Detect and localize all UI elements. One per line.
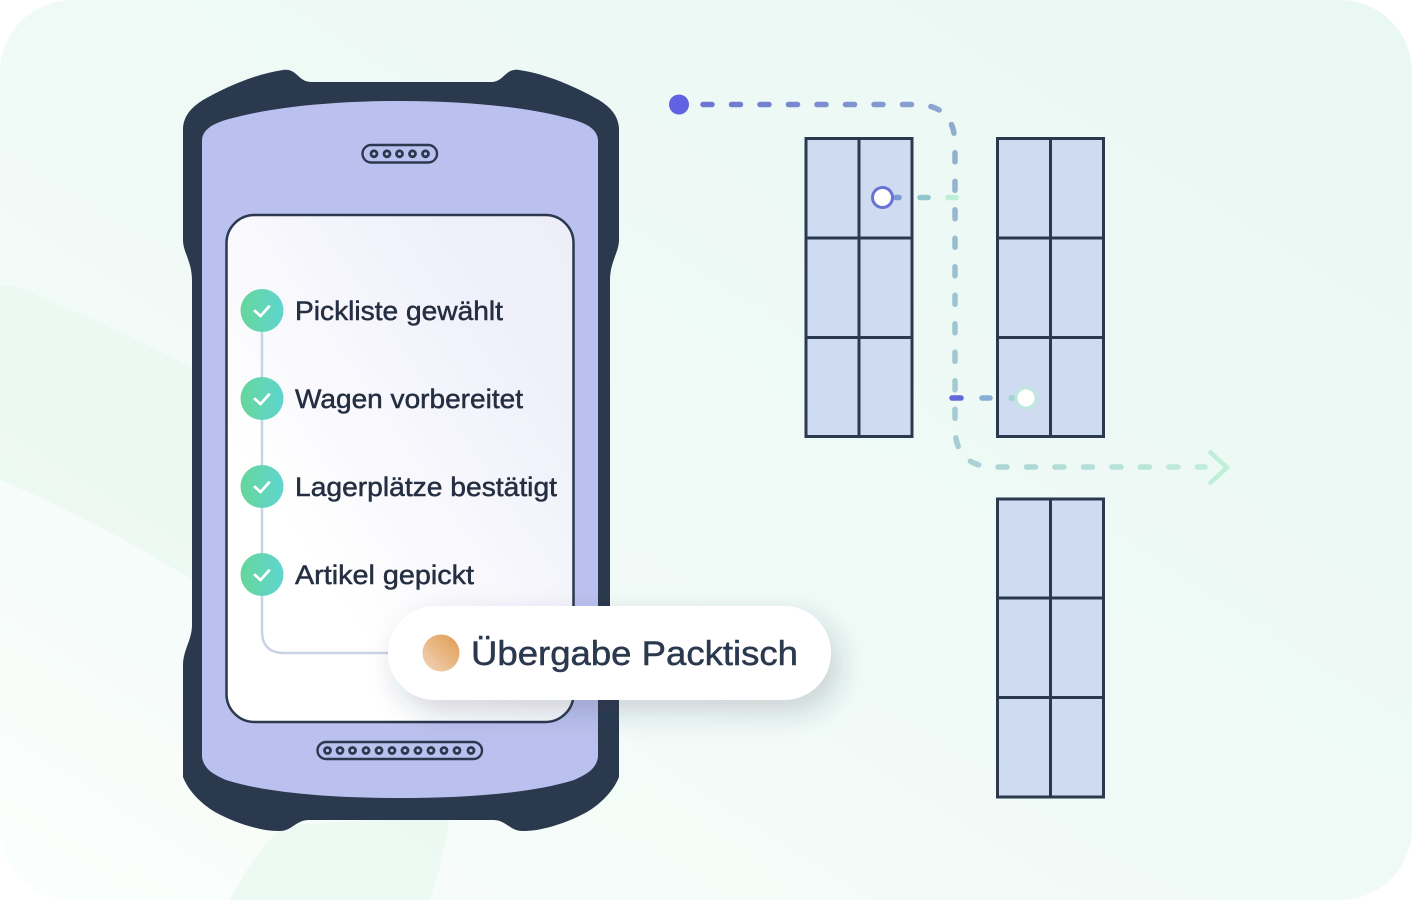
checklist step: Lagerplätze bestätigt: Lagerplätze bestätigt (295, 472, 558, 502)
checklist step: Artikel gepickt (240, 553, 475, 596)
dashed walking route (669, 94, 1205, 467)
branch to first pick location (896, 195, 899, 200)
device face (202, 101, 598, 798)
shelf rack 3 (998, 499, 1104, 797)
device body (183, 70, 619, 831)
screen (226, 215, 574, 722)
checklist connector line (262, 310, 400, 653)
pick location marker 1 (872, 188, 892, 208)
shelf rack 2 (998, 138, 1104, 436)
checklist step: Lagerplätze bestätigt (240, 465, 558, 508)
checklist step: Wagen vorbereitet (240, 377, 524, 420)
handheld scanner device (183, 70, 619, 831)
icon: orange status dot (422, 634, 460, 672)
checklist step: Artikel gepickt: Artikel gepickt (295, 560, 475, 590)
branch to second pick location (952, 395, 961, 401)
checklist step: Pickliste gewählt: Pickliste gewählt (295, 296, 504, 326)
callout: Übergabe Packtisch: Übergabe Packtisch (471, 635, 798, 673)
bottom speaker (318, 742, 482, 759)
route start dot (669, 94, 689, 114)
callout: Übergabe Packtisch (388, 606, 831, 700)
pick location marker 2 (1016, 388, 1036, 408)
checklist step: Pickliste gewählt (240, 289, 504, 332)
shelf rack 1 (806, 138, 912, 436)
arrow head (1209, 451, 1227, 484)
checklist step: Wagen vorbereitet: Wagen vorbereitet (295, 384, 524, 414)
top speaker (362, 145, 437, 162)
